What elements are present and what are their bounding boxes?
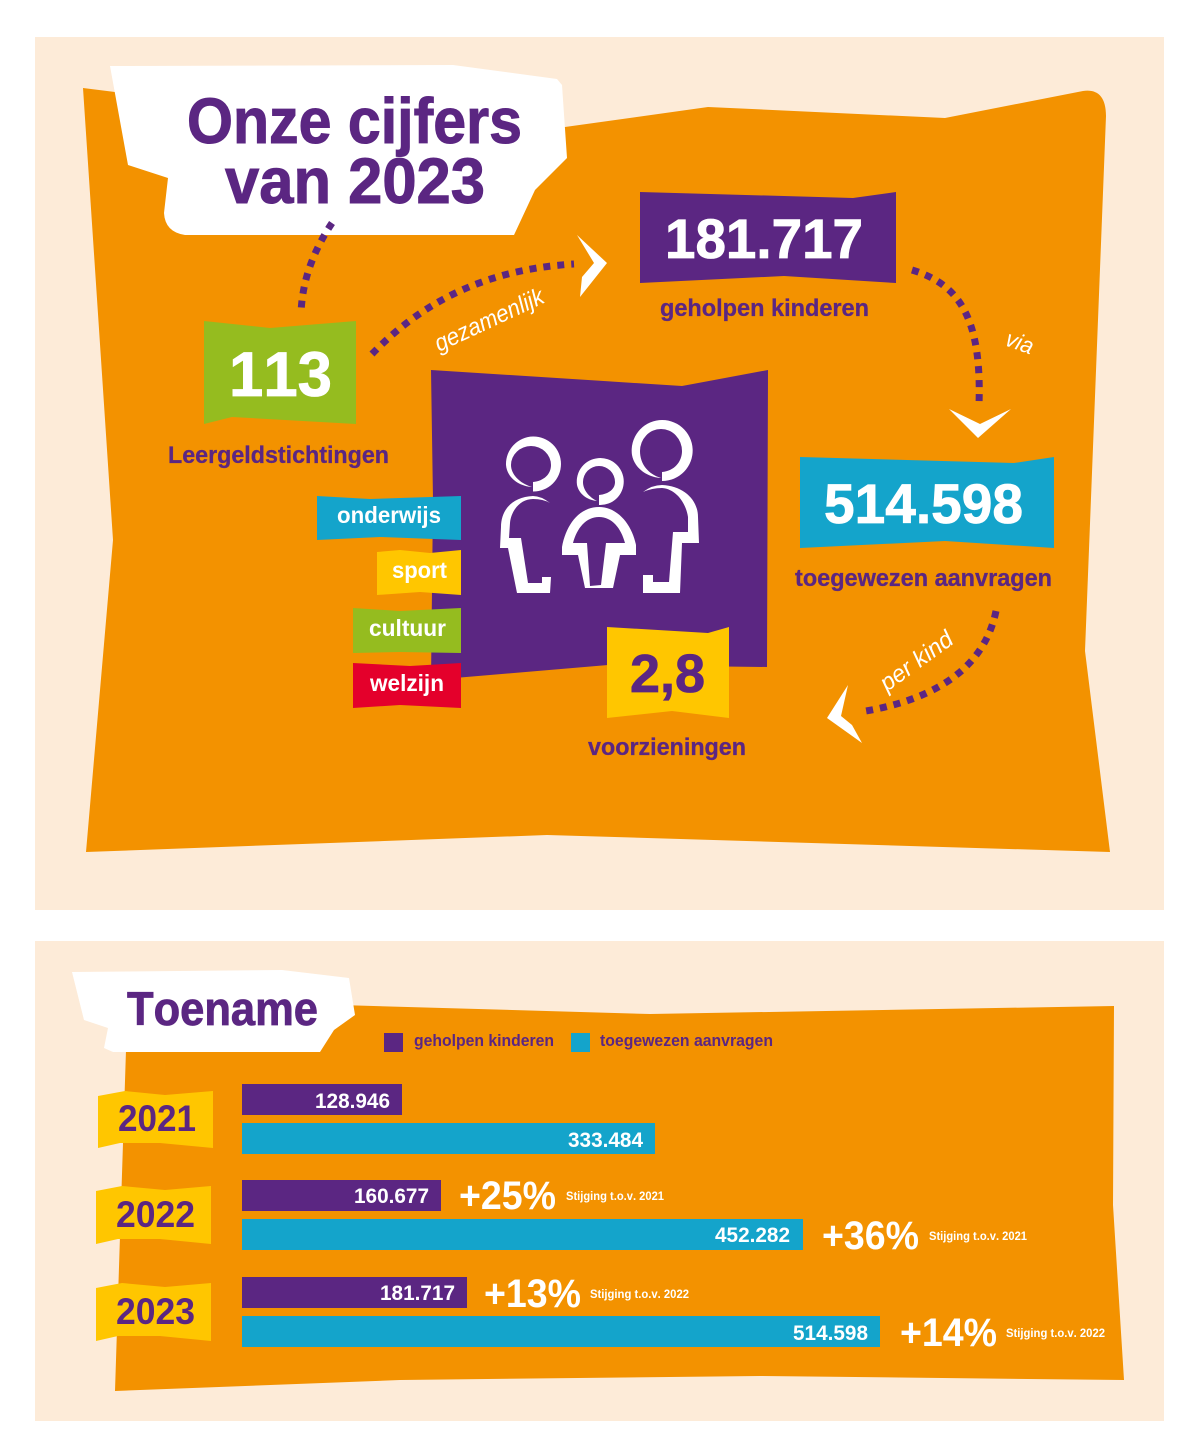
bar: 2023 geholpen kinderen: +13% (484, 1272, 581, 1316)
heading: Toename: Toename (127, 982, 318, 1035)
bar chart (242, 1084, 1105, 1355)
arrow: per kind (827, 611, 996, 743)
label: onderwijs (317, 496, 461, 540)
arrow: per kind: per kind (874, 625, 959, 697)
label: welzijn: welzijn (369, 670, 444, 696)
bar: 2023 toegewezen aanvragen: +14% (900, 1311, 997, 1355)
bar: 2022 geholpen kinderen (242, 1174, 665, 1218)
title banner: van 2023 (225, 145, 485, 217)
stat: 514.598 toegewezen aanvragen: 514.598 (824, 472, 1023, 535)
bar: 2022 geholpen kinderen: Stijging t.o.v. 2021 (566, 1191, 665, 1203)
bar: 2022 geholpen kinderen: 160.677 (354, 1185, 429, 1208)
bar: 2023 toegewezen aanvragen (242, 1311, 1105, 1355)
arrow: via: via (1002, 325, 1037, 359)
icon: family (500, 420, 699, 593)
arrow: via (912, 270, 1037, 438)
bar: 2022 toegewezen aanvragen: 452.282 (715, 1224, 790, 1247)
orange background shape (83, 88, 1110, 852)
stat: 514.598 toegewezen aanvragen: toegewezen aanvragen (795, 565, 1052, 592)
bar: 2022 toegewezen aanvragen: Stijging t.o.v. 2021 (929, 1231, 1028, 1243)
label: cultuur: cultuur (369, 615, 446, 641)
bar: 2023 geholpen kinderen (242, 1272, 689, 1316)
bar: 2021 toegewezen aanvragen (242, 1123, 655, 1154)
panel: onze cijfers (35, 37, 1164, 910)
stat: 113 Leergeldstichtingen (168, 321, 389, 469)
bar: 2021 toegewezen aanvragen: 333.484 (568, 1129, 643, 1152)
bar: 2023 geholpen kinderen: 181.717 (380, 1282, 455, 1305)
bar: 2022 toegewezen aanvragen: +36% (822, 1214, 919, 1258)
label: cultuur (353, 608, 461, 653)
stat: 2,8 voorzieningen (588, 627, 746, 761)
orange background shape (115, 1005, 1124, 1391)
stat: 181.717 geholpen kinderen: geholpen kinderen (660, 295, 869, 322)
year label: 2022: 2022 (116, 1194, 195, 1235)
label: sport: sport (392, 557, 447, 583)
stat: 113 Leergeldstichtingen: Leergeldstichtingen (168, 442, 389, 469)
panel: voorzieningen family (317, 370, 768, 761)
stat: 181.717 geholpen kinderen: 181.717 (665, 207, 863, 270)
heading: Toename (72, 970, 355, 1052)
label: sport (377, 550, 461, 595)
year label: 2021 (98, 1091, 213, 1148)
year label: 2022 (96, 1186, 211, 1244)
bar: 2023 toegewezen aanvragen: Stijging t.o.v. 2022 (1006, 1328, 1105, 1340)
bar: 2021 geholpen kinderen: 128.946 (315, 1090, 390, 1113)
title banner: Onze cijfers (187, 85, 522, 157)
bar: 2023 toegewezen aanvragen: 514.598 (793, 1322, 868, 1345)
stat: 181.717 geholpen kinderen (640, 192, 896, 322)
bar: 2021 geholpen kinderen (242, 1084, 402, 1115)
year label: 2023 (96, 1283, 211, 1341)
year label: 2023: 2023 (116, 1291, 195, 1332)
arrow: gezamenlijk: gezamenlijk (430, 282, 550, 357)
stat: 514.598 toegewezen aanvragen (795, 457, 1054, 592)
bar: 2023 geholpen kinderen: Stijging t.o.v. 2022 (590, 1289, 689, 1301)
legend: geholpen kinderen (414, 1032, 554, 1050)
label: welzijn (353, 663, 461, 708)
stat: 2,8 voorzieningen: 2,8 (630, 644, 705, 704)
legend: toegewezen aanvragen (600, 1032, 773, 1050)
arrow: title to stichtingen (301, 223, 332, 314)
legend (384, 1032, 773, 1052)
panel: toename (35, 941, 1164, 1421)
arrow: gezamenlijk (372, 235, 607, 357)
bar: 2022 geholpen kinderen: +25% (459, 1174, 556, 1218)
bar: 2022 toegewezen aanvragen (242, 1214, 1028, 1258)
stat: 113 Leergeldstichtingen: 113 (229, 340, 332, 410)
label: onderwijs: onderwijs (337, 502, 441, 528)
title banner (110, 65, 567, 235)
year label: 2021: 2021 (118, 1098, 196, 1139)
stat: 2,8 voorzieningen: voorzieningen (588, 734, 746, 761)
